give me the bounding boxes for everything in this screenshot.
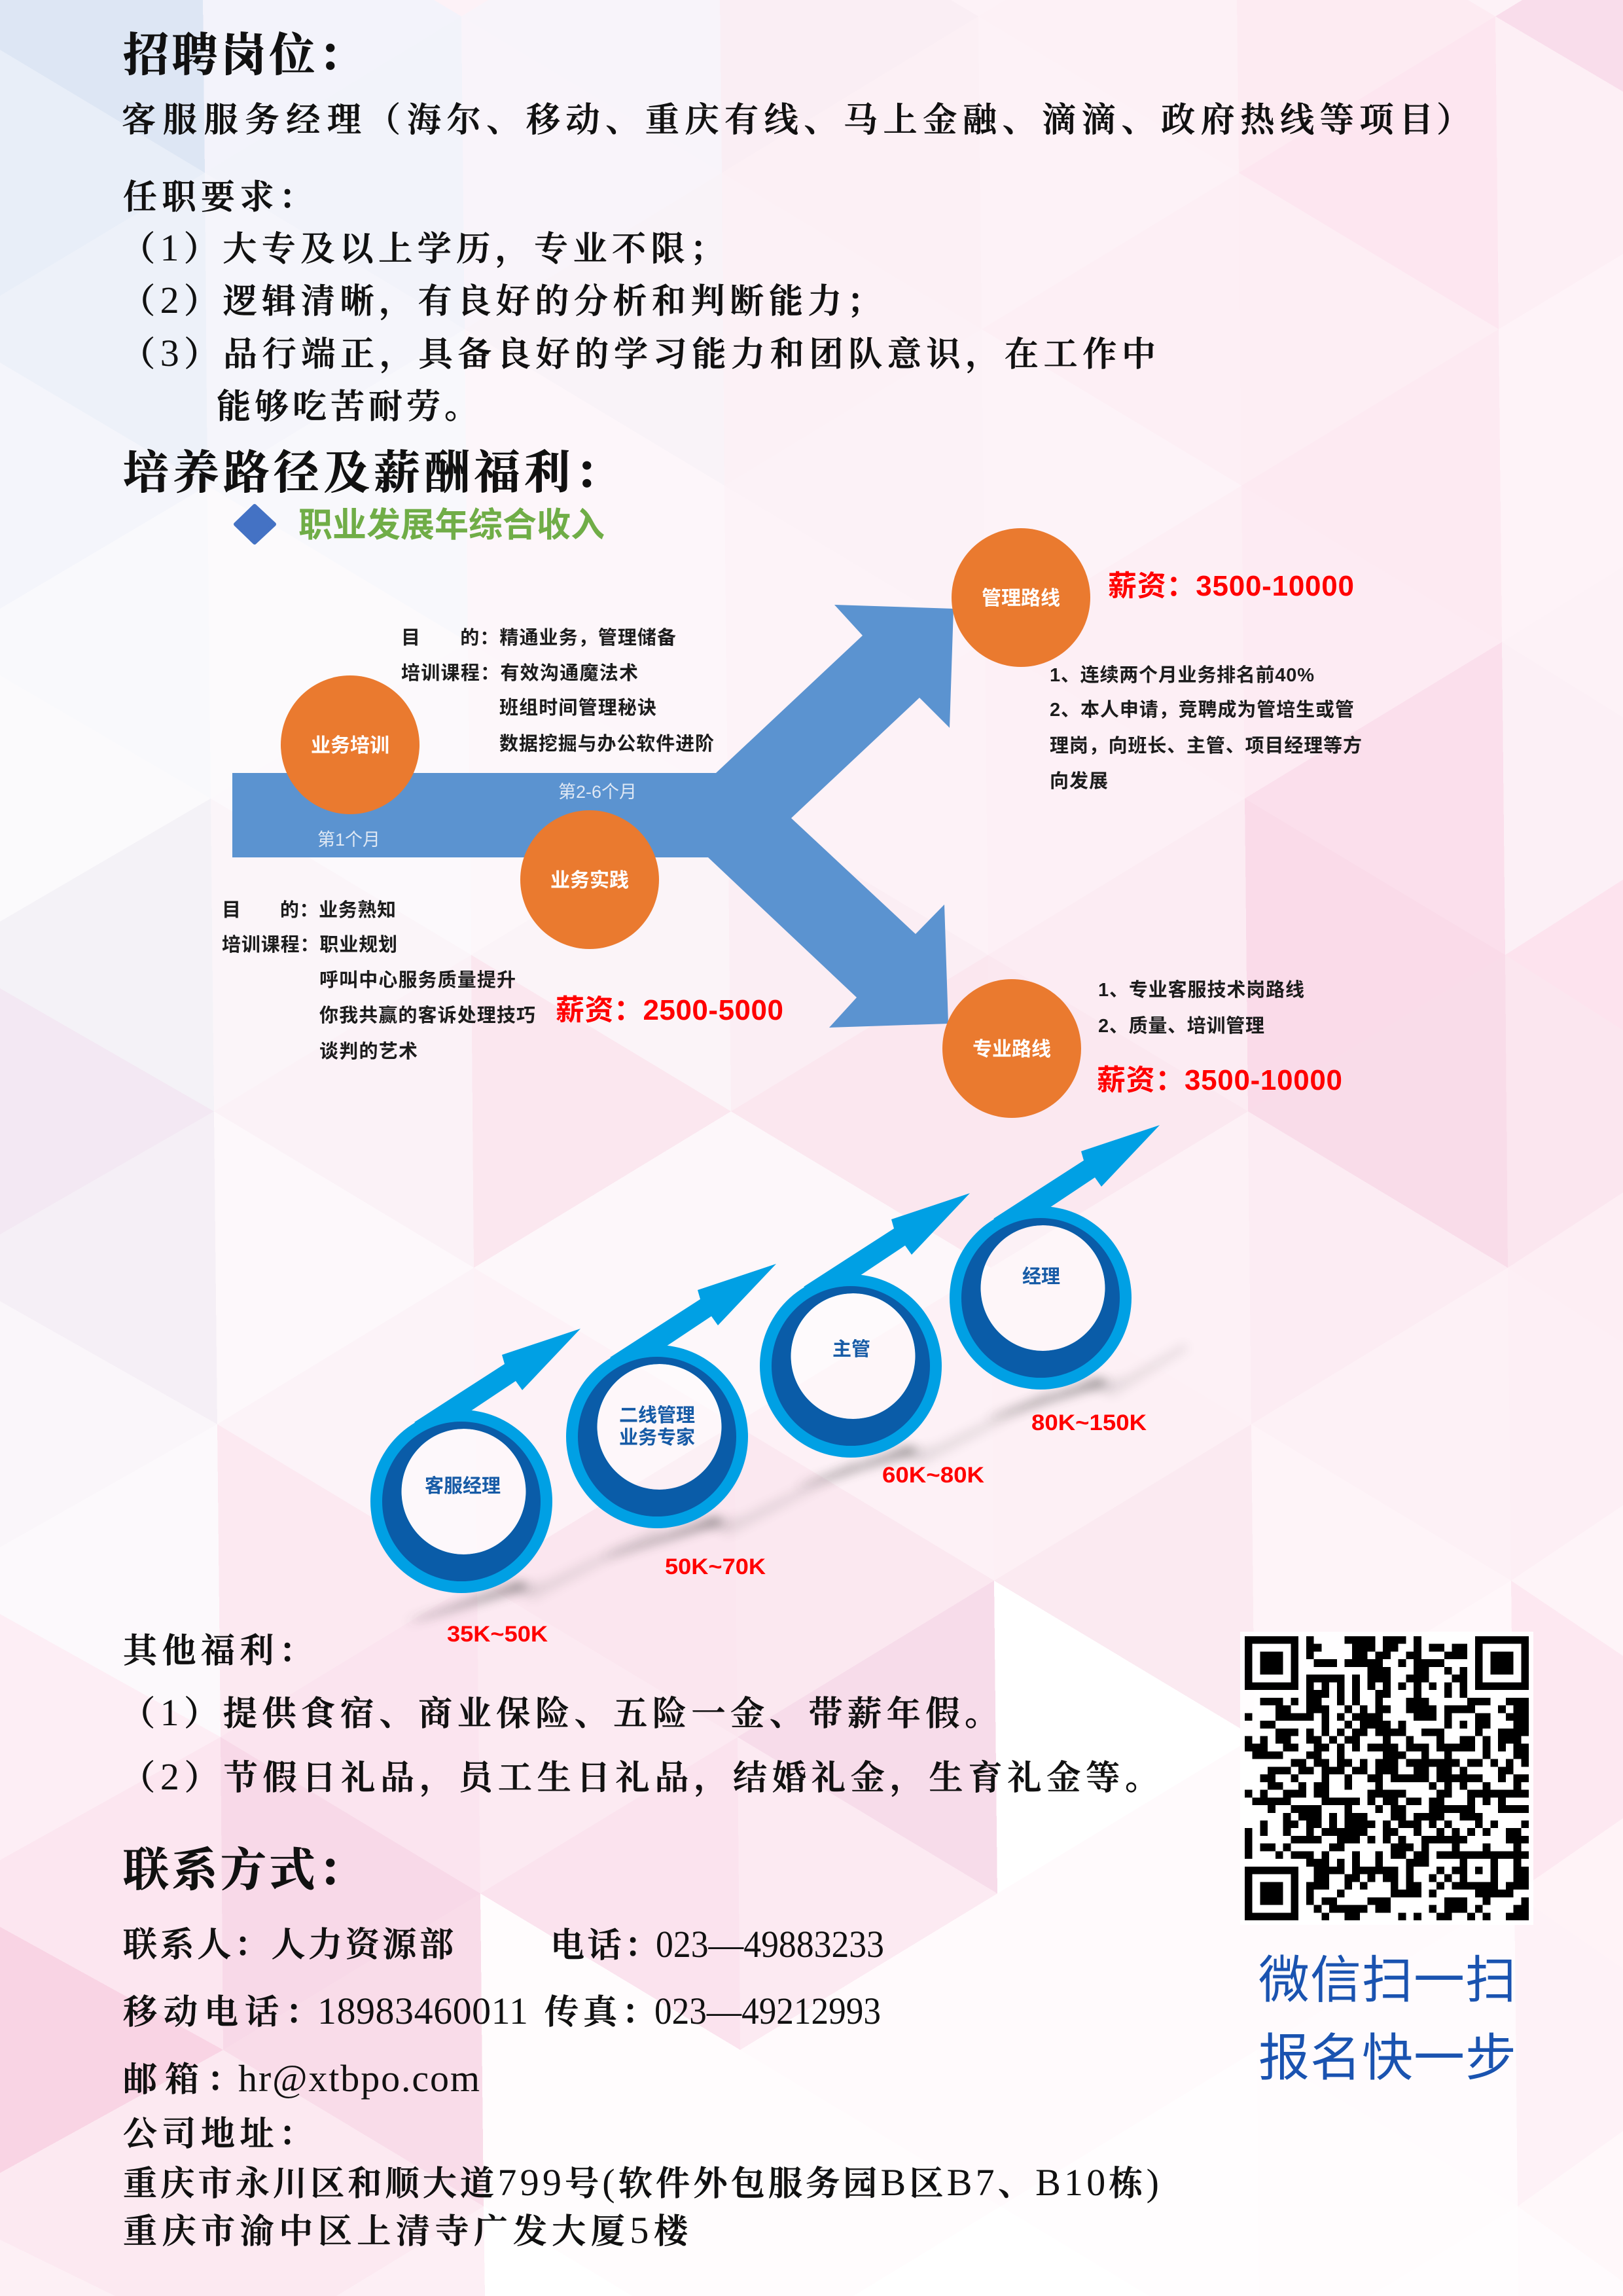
text: requirement 3: （3）品行端正，具备良好的学习能力和团队意识，在工作中 (121, 332, 1156, 374)
arrow: forked career path (232, 605, 954, 1028)
ring: 二线管理 业务专家: 二线管理 (619, 1405, 695, 1426)
text: position: ） (1436, 102, 1471, 139)
icon: diamond bullet (236, 506, 274, 543)
text: requirement 2: （2）逻辑清晰，有良好的分析和判断能力； (121, 279, 881, 321)
node: 专业路线 (942, 979, 1081, 1118)
text: business training detail: 班组时间管理秘诀 (499, 697, 656, 719)
text: management path detail: 向发展 (1050, 770, 1108, 792)
text: professional path detail: 2、质量、培训管理 (1098, 1015, 1264, 1037)
text: business practice detail: 目 的：业务熟知 (222, 895, 396, 922)
text: email: 邮箱： (123, 2062, 241, 2099)
ring: 二线管理 业务专家 (566, 1264, 776, 1528)
ring: 经理 (950, 1125, 1160, 1390)
text: email: hr@xtbpo.com (238, 2057, 480, 2100)
text: requirements label: 任职要求： (123, 179, 313, 217)
text: mobile and fax: 023—49212993 (654, 1990, 881, 2032)
QR code (1240, 1632, 1533, 1925)
text: professional path detail: 1、专业客服技术岗路线 (1098, 979, 1304, 1001)
salary: 2500-5000: 薪资：2500-5000 (556, 986, 783, 1028)
text: mobile and fax: 移动电话： (123, 1994, 319, 2032)
text: requirement 3 continuation: 能够吃苦耐劳。 (217, 388, 478, 426)
ring: 主管: 主管 (832, 1338, 870, 1360)
text: email (123, 2057, 480, 2100)
heading: 招聘岗位: 招聘岗位： (123, 31, 364, 81)
ring: 二线管理 业务专家: 业务专家 (619, 1427, 695, 1448)
ring: 经理: 经理 (1022, 1266, 1060, 1287)
node: 业务实践: 业务实践 (550, 870, 629, 891)
node: 管理路线: 管理路线 (982, 588, 1060, 609)
text: phone: 023—49883233 (656, 1923, 884, 1965)
caption: scan WeChat to apply (1258, 1951, 1516, 2087)
text: mobile and fax (123, 1990, 881, 2032)
salary range: 50K~70K: 50K~70K (665, 1554, 766, 1579)
label: months 2-6: 第2-6个月 (558, 782, 637, 802)
text: benefit 1: （1）提供食宿、商业保险、五险一金、带薪年假。 (121, 1691, 999, 1734)
section: contact (123, 1846, 1159, 2251)
text: benefits label: 其他福利： (123, 1633, 313, 1670)
career path diagram (222, 528, 1362, 1118)
text: position: 海尔、移动、重庆有线、马上金融、滴滴、政府热线等项目 (407, 102, 1433, 139)
text: business practice detail: 谈判的艺术 (319, 1041, 418, 1062)
text: phone (550, 1923, 884, 1965)
text: address 1: 重庆市永川区和顺大道799号(软件外包服务园B区B7、B10栋) (123, 2161, 1159, 2204)
node: 专业路线: 专业路线 (972, 1039, 1051, 1060)
ring: 主管 (760, 1193, 970, 1458)
text: mobile and fax: 18983460011 (317, 1990, 528, 2032)
salary range: 80K~150K: 80K~150K (1031, 1410, 1147, 1435)
node: 业务实践 (520, 810, 659, 949)
text: benefit 2: （2）节假日礼品，员工生日礼品，结婚礼金，生育礼金等。 (121, 1755, 1159, 1798)
ring: 客服经理 (370, 1329, 580, 1593)
text: address label: 公司地址： (123, 2116, 313, 2153)
text: professional path detail (1098, 979, 1304, 1037)
salary: professional 3500-10000: 薪资：3500-10000 (1097, 1056, 1342, 1098)
career ladder chart (370, 1125, 1188, 1647)
text: contact person: 联系人：人力资源部 (123, 1927, 454, 1964)
text: business training detail: 数据挖掘与办公软件进阶 (499, 733, 714, 755)
node: 业务培训 (281, 675, 419, 814)
text: business practice detail: 呼叫中心服务质量提升 (319, 969, 516, 991)
text: address 2: 重庆市渝中区上清寺广发大厦5楼 (123, 2209, 690, 2251)
text: business practice detail (222, 895, 535, 1062)
text: management path detail: 2、本人申请，竞聘成为管培生或管 (1050, 694, 1354, 722)
text: business training detail: 培训课程：有效沟通魔法术 (401, 658, 638, 685)
salary range: 35K~50K: 35K~50K (447, 1622, 548, 1647)
text: position: （ (366, 102, 401, 139)
text: mobile and fax: 传真： (544, 1994, 656, 2032)
heading: contact: 联系方式： (123, 1846, 364, 1896)
text: requirement 1: （1）大专及以上学历，专业不限； (121, 226, 724, 269)
salary: management 3500-10000: 薪资：3500-10000 (1108, 562, 1354, 604)
ring: 客服经理: 客服经理 (425, 1475, 501, 1497)
label: month 1: 第1个月 (317, 830, 380, 850)
caption: scan WeChat to apply: 微信扫一扫 (1258, 1951, 1516, 2009)
text: business training detail (401, 622, 714, 755)
text: business practice detail: 你我共赢的客诉处理技巧 (319, 1005, 535, 1026)
subheading with diamond bullet (236, 506, 605, 545)
salary range: 60K~80K: 60K~80K (882, 1463, 984, 1488)
heading: training path and pay: 培养路径及薪酬福利： (123, 448, 620, 499)
text: management path detail: 理岗，向班长、主管、项目经理等方 (1050, 730, 1362, 758)
subheading: 职业发展年综合收入: 职业发展年综合收入 (298, 507, 605, 545)
shadows under rings (406, 1344, 1188, 1623)
section: other benefits (121, 1633, 1159, 1798)
text: phone: 电话： (550, 1928, 658, 1965)
text: position: 客服服务经理 (122, 102, 361, 139)
text: management path detail: 1、连续两个月业务排名前40% (1050, 664, 1314, 686)
text: business practice detail: 培训课程：职业规划 (222, 929, 397, 957)
section: job post and requirements (121, 31, 1471, 426)
caption: scan WeChat to apply: 报名快一步 (1258, 2029, 1516, 2087)
text: business training detail: 目 的：精通业务，管理储备 (401, 622, 676, 650)
node: 管理路线 (952, 528, 1090, 667)
text: management path detail (1050, 664, 1362, 792)
node: 业务培训: 业务培训 (311, 735, 389, 757)
